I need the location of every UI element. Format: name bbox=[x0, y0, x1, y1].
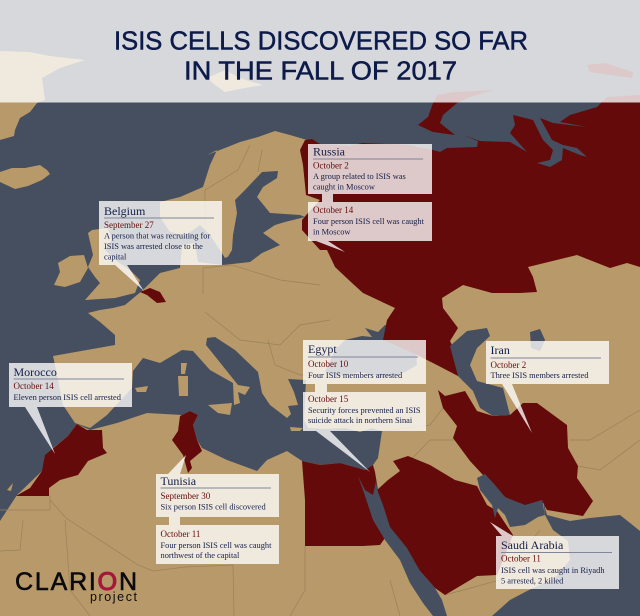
Morocco country bbox=[16, 424, 107, 496]
panel: Saudi Arabia: ISIS cell was caught in Riyadh bbox=[501, 566, 605, 575]
panel: Saudi Arabia: Saudi Arabia bbox=[501, 538, 564, 552]
logo: Clarion project: CLARION bbox=[15, 568, 137, 596]
panel: Egypt: Egypt bbox=[308, 342, 337, 356]
panel: Russia: Russia bbox=[313, 144, 346, 158]
panel: Belgium: Belgium bbox=[104, 204, 146, 218]
panel: Egypt: Four ISIS members arrested bbox=[308, 371, 403, 380]
panel: Morocco: Eleven person ISIS cell arrested bbox=[14, 393, 122, 402]
seas bbox=[223, 171, 545, 378]
borders bbox=[0, 145, 640, 616]
panel: Russia: October 2 bbox=[313, 160, 349, 170]
panel: Saudi Arabia bbox=[490, 522, 619, 589]
panel: Saudi Arabia: October 11 bbox=[501, 554, 541, 564]
panel: Saudi Arabia: 5 arrested, 2 killed bbox=[501, 576, 564, 586]
panel: Tunisia bbox=[156, 455, 279, 564]
panel: Tunisia: Four person ISIS cell was caught bbox=[160, 541, 272, 550]
Tunisia country bbox=[172, 411, 202, 473]
panel: Russia: Four person ISIS cell was caught bbox=[313, 217, 425, 226]
title: IN THE FALL OF 2017 bbox=[184, 56, 457, 86]
panel: Morocco bbox=[9, 363, 132, 454]
Russia bbox=[300, 95, 640, 376]
panel: Iran: Three ISIS members arrested bbox=[490, 371, 589, 380]
title: ISIS CELLS DISCOVERED SO FAR bbox=[114, 26, 528, 56]
panel: Russia: October 14 bbox=[313, 205, 354, 215]
panel: Egypt bbox=[303, 340, 426, 472]
panel: Egypt: suicide attack in northern Sinai bbox=[308, 416, 413, 425]
panel: Tunisia: September 30 bbox=[160, 491, 211, 501]
panel: Egypt: Security forces prevented an ISIS bbox=[308, 406, 421, 415]
panel: Egypt: October 10 bbox=[308, 359, 349, 369]
panel: Iran: Iran bbox=[490, 343, 510, 357]
logo: Clarion project: project bbox=[90, 590, 138, 604]
panel: Belgium: ISIS was arrested close to the bbox=[104, 242, 203, 251]
panel: Morocco: October 14 bbox=[14, 381, 54, 391]
panel: Tunisia: October 11 bbox=[160, 529, 200, 539]
Saudi Arabia country bbox=[377, 456, 513, 595]
panel: Russia: caught in Moscow bbox=[313, 182, 376, 192]
panel: Egypt: October 15 bbox=[308, 394, 349, 404]
panel: Iran bbox=[486, 341, 609, 433]
panel: Belgium: September 27 bbox=[104, 220, 154, 230]
panel: Morocco: Morocco bbox=[14, 365, 57, 379]
Novaya Zemlya bbox=[418, 90, 493, 135]
panel: Tunisia: Tunisia bbox=[160, 474, 197, 488]
title bbox=[114, 26, 528, 86]
panel: Russia bbox=[308, 144, 432, 252]
panel: Russia: A group related to ISIS was bbox=[313, 172, 406, 181]
panel: Belgium bbox=[99, 201, 222, 291]
seas over countries bbox=[358, 328, 640, 616]
top title band bbox=[0, 0, 640, 102]
panel: Tunisia: northwest of the capital bbox=[160, 551, 240, 560]
Iran country bbox=[438, 390, 593, 516]
panel: Russia: in Moscow bbox=[313, 228, 351, 236]
panel: Belgium: capital bbox=[104, 252, 127, 262]
panel: Tunisia: Six person ISIS cell discovered bbox=[160, 502, 266, 512]
Egypt country bbox=[302, 461, 385, 546]
Severnaya Zemlya bbox=[587, 63, 633, 78]
panel: Iran: October 2 bbox=[490, 360, 526, 370]
panel: Belgium: A person that was recruiting for bbox=[104, 232, 210, 240]
Belgium country bbox=[140, 288, 166, 303]
